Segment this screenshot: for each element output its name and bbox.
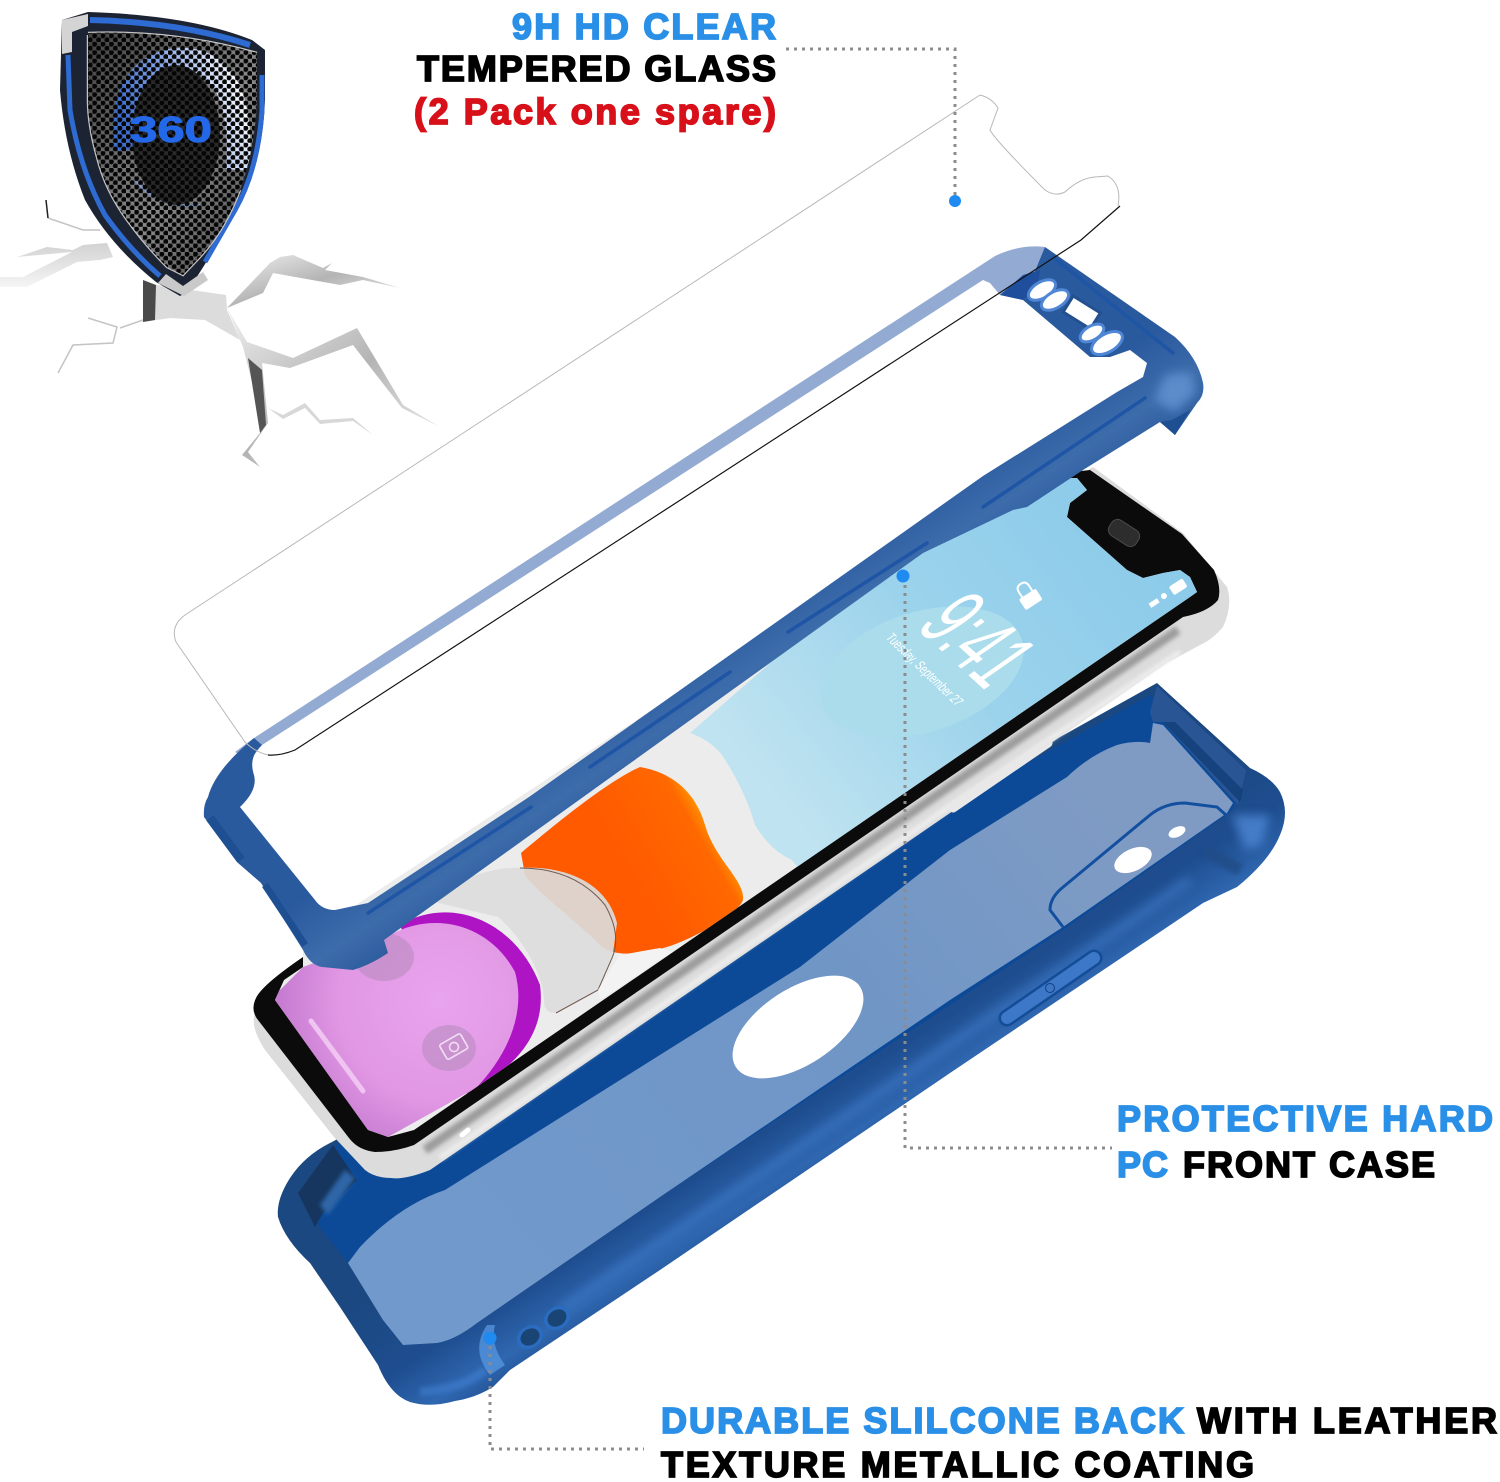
label: front case: PROTECTIVE HARD [1117,1098,1493,1139]
label: tempered glass: 9H HD CLEAR [512,6,776,47]
bottom speaker holes [512,1320,548,1354]
camera button [422,1025,476,1071]
label: back case [661,1400,1497,1482]
360 text: 360 [130,109,212,150]
connector: back case [484,1332,644,1449]
magenta crescent [400,912,541,1100]
back case inner wall [318,695,1240,1345]
sensor holes [1025,276,1126,359]
phone silver body [254,467,1229,1178]
side button [953,743,1048,808]
glass black edge [268,206,1120,755]
dark centre [132,65,220,205]
tip shadow [1160,410,1190,435]
label: back case: WITH LEATHER [1197,1400,1497,1441]
shield mesh [88,32,257,275]
rail highlights [420,815,1270,1392]
shield silver corners [62,14,88,54]
label: front case [1117,1098,1493,1185]
power button [1007,958,1094,1018]
back silicone case [278,683,1285,1405]
bumper highlight [479,1325,505,1375]
left side buttons [210,818,241,860]
earpiece [1106,517,1142,549]
teal circle [875,606,1024,724]
screen wallpaper [250,460,1220,1150]
lock date text: Tuesday, September 27 [882,631,967,709]
grey crescent [426,868,617,1013]
status icons [1148,578,1187,608]
home bar [311,1021,363,1091]
label: tempered glass [414,6,776,132]
top right corner wall [1150,686,1246,805]
shield silver line [88,33,257,275]
silver shading [425,630,1178,1150]
shield blue stripes [90,20,250,45]
light blue wallpaper [690,460,1210,870]
corner lit tube [320,1170,355,1215]
antenna band [462,1130,468,1135]
shield badge [0,12,440,467]
side slots [368,257,1173,913]
tempered glass protector [174,95,1120,755]
logo cut-out [715,955,881,1099]
cracked ground [0,200,440,467]
back case lighter panel [348,723,1233,1345]
padlock icon [1016,582,1042,610]
top notch shadow [1000,270,1040,300]
frame body [204,247,1203,970]
orange shape [521,767,743,954]
progress arc [125,60,239,170]
corner inner shadow [298,1145,357,1227]
front hard case [204,246,1203,970]
corner shine [1155,372,1196,412]
label: back case: DURABLE SLILCONE BACK [661,1400,1184,1441]
label: front case: PC [1117,1144,1168,1185]
label: tempered glass: TEMPERED GLASS [417,48,776,89]
shield outer rim [60,12,265,296]
connector: glass [786,49,961,207]
connector: front case [896,570,1112,1148]
label: tempered glass: (2 Pack one spare) [414,91,776,132]
phone black bezel [253,470,1219,1152]
pink circle [260,923,518,1137]
flashlight button [354,933,414,981]
label: front case: FRONT CASE [1183,1144,1435,1185]
phone [250,460,1229,1178]
translucent top edge [235,246,1056,760]
lock time text: 9:41 [897,577,1057,703]
camera recess [1050,803,1226,927]
